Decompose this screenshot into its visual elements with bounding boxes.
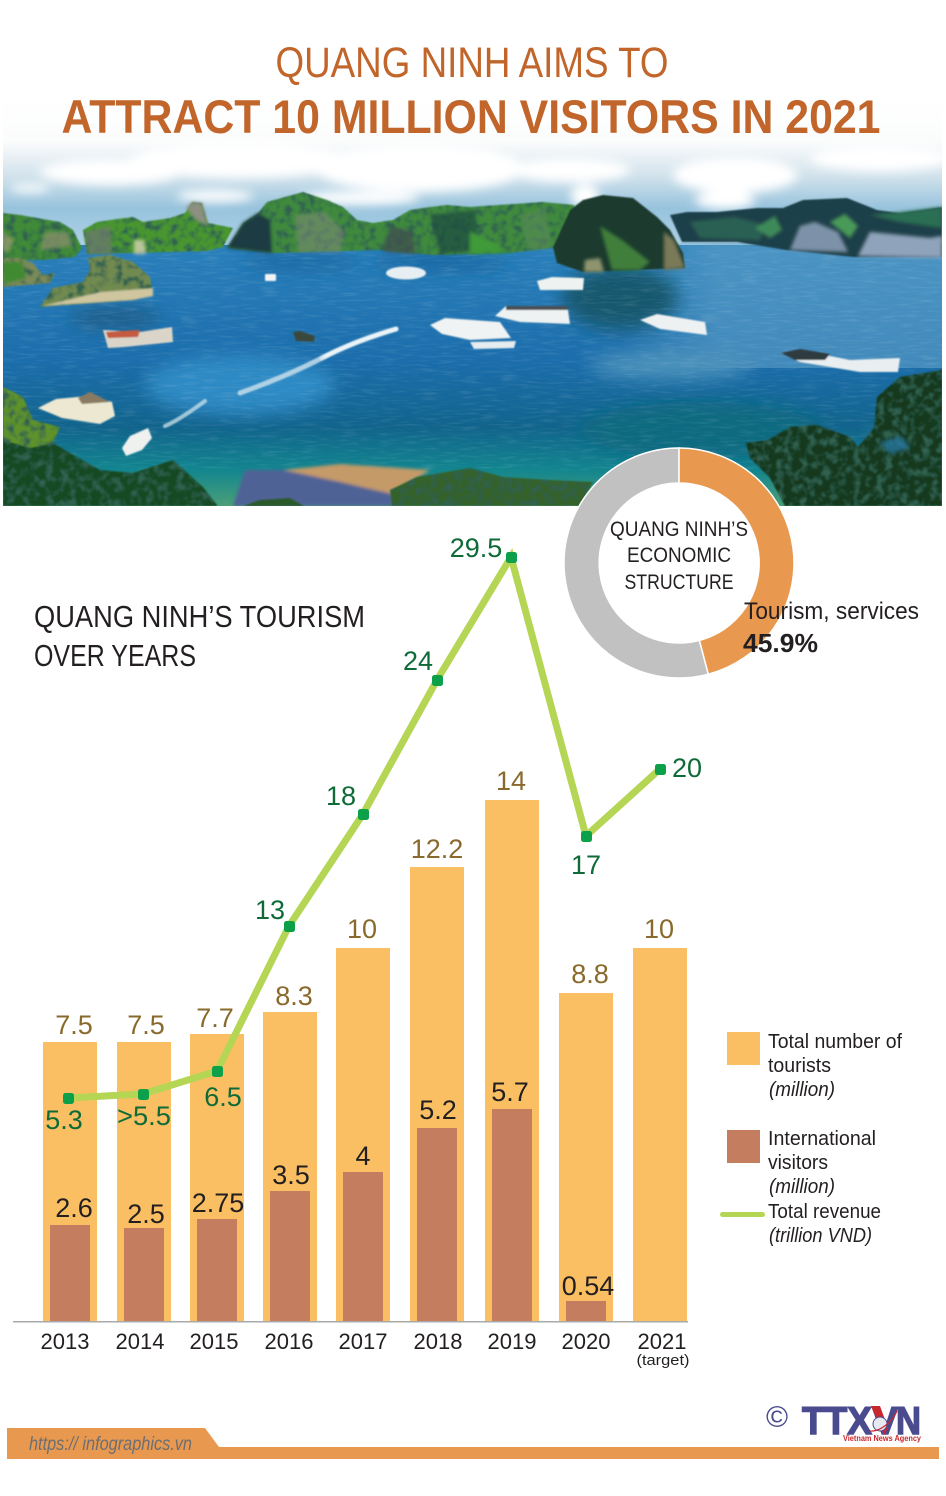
boats — [38, 266, 900, 456]
values: international visitors: 2.75 — [192, 1188, 244, 1218]
year labels: (target) — [636, 1352, 690, 1369]
legend: Total revenue — [768, 1201, 881, 1223]
logo: TTXVN: N — [896, 1400, 921, 1443]
year labels: 2013 — [41, 1329, 89, 1354]
donut chart: economic structure: STRUCTURE — [624, 571, 734, 594]
values: total revenue: 6.5 — [204, 1082, 242, 1112]
legend — [720, 1031, 902, 1247]
donut chart: economic structure: ECONOMIC — [627, 544, 731, 567]
values: international visitors — [55, 1077, 614, 1301]
year labels: 2015 — [190, 1329, 238, 1354]
values: total revenue: 17 — [571, 850, 601, 880]
axis line — [13, 1321, 688, 1322]
values: total revenue: 24 — [403, 646, 433, 676]
title: QUANG NINH AIMS TO — [276, 39, 668, 87]
values: total revenue — [45, 533, 702, 1135]
legend: tourists — [768, 1055, 831, 1077]
donut label: tourism share: 45.9% — [743, 628, 818, 658]
values: total revenue: >5.5 — [117, 1101, 171, 1131]
logo: TTXVN: V — [872, 1400, 898, 1443]
legend: International — [768, 1128, 876, 1150]
values: total tourists: 12.2 — [411, 834, 463, 864]
legend: Total number of — [768, 1031, 902, 1053]
year labels: 2021 — [638, 1329, 686, 1354]
chart heading: OVER YEARS — [34, 638, 196, 673]
legend: (trillion VND) — [769, 1225, 872, 1247]
chart heading: QUANG NINH’S TOURISM — [34, 599, 365, 634]
values: international visitors: 4 — [355, 1141, 371, 1171]
values: total revenue: 13 — [255, 895, 285, 925]
values: international visitors: 0.54 — [562, 1271, 614, 1301]
values: international visitors: 5.2 — [419, 1095, 457, 1125]
bars: total tourists — [43, 800, 687, 1322]
year labels: 2017 — [339, 1329, 387, 1354]
donut label: tourism share: Tourism, services — [744, 598, 919, 625]
title: ATTRACT 10 MILLION VISITORS IN 2021 — [62, 90, 880, 143]
values: total tourists: 8.3 — [275, 981, 313, 1011]
donut label: tourism share — [743, 598, 919, 658]
values: total tourists: 10 — [644, 914, 674, 944]
wake — [165, 329, 396, 426]
legend: visitors — [768, 1152, 828, 1174]
values: international visitors: 5.7 — [491, 1077, 529, 1107]
footer bar: https:// infographics.vn — [29, 1434, 192, 1455]
photo: Ha Long Bay — [3, 146, 942, 506]
values: total revenue: 29.5 — [450, 533, 502, 563]
bars: international visitors — [50, 1109, 606, 1322]
logo: TTXVN — [766, 1400, 921, 1443]
year labels: 2019 — [488, 1329, 536, 1354]
values: international visitors: 3.5 — [272, 1160, 310, 1190]
values: total revenue: 5.3 — [45, 1105, 83, 1135]
logo: TTXVN: © — [766, 1401, 788, 1434]
values: total tourists: 7.5 — [55, 1010, 93, 1040]
values: total revenue: 18 — [326, 781, 356, 811]
values: international visitors: 2.5 — [127, 1199, 165, 1229]
values: total tourists: 10 — [347, 914, 377, 944]
legend: (million) — [769, 1079, 835, 1101]
title — [62, 39, 880, 143]
values: international visitors: 2.6 — [55, 1193, 93, 1223]
donut chart: economic structure — [564, 448, 794, 678]
year labels: 2018 — [414, 1329, 462, 1354]
year labels — [41, 1329, 690, 1369]
year labels: 2014 — [116, 1329, 164, 1354]
logo: TTXVN: TTX — [802, 1400, 872, 1443]
values: total tourists: 7.5 — [127, 1010, 165, 1040]
values: total tourists — [55, 766, 674, 1040]
footer bar — [7, 1428, 939, 1459]
chart heading — [34, 599, 365, 673]
values: total revenue: 20 — [672, 753, 702, 783]
year labels: 2016 — [265, 1329, 313, 1354]
values: total tourists: 14 — [496, 766, 526, 796]
legend: (million) — [769, 1176, 835, 1198]
logo: TTXVN: Vietnam News Agency — [843, 1433, 921, 1443]
line: total revenue — [63, 552, 666, 1104]
values: total tourists: 8.8 — [571, 959, 609, 989]
beach — [233, 464, 430, 506]
foliage — [3, 370, 942, 506]
donut chart: economic structure: QUANG NINH’S — [610, 518, 748, 541]
year labels: 2020 — [562, 1329, 610, 1354]
values: total tourists: 7.7 — [196, 1003, 234, 1033]
islands — [3, 192, 942, 307]
